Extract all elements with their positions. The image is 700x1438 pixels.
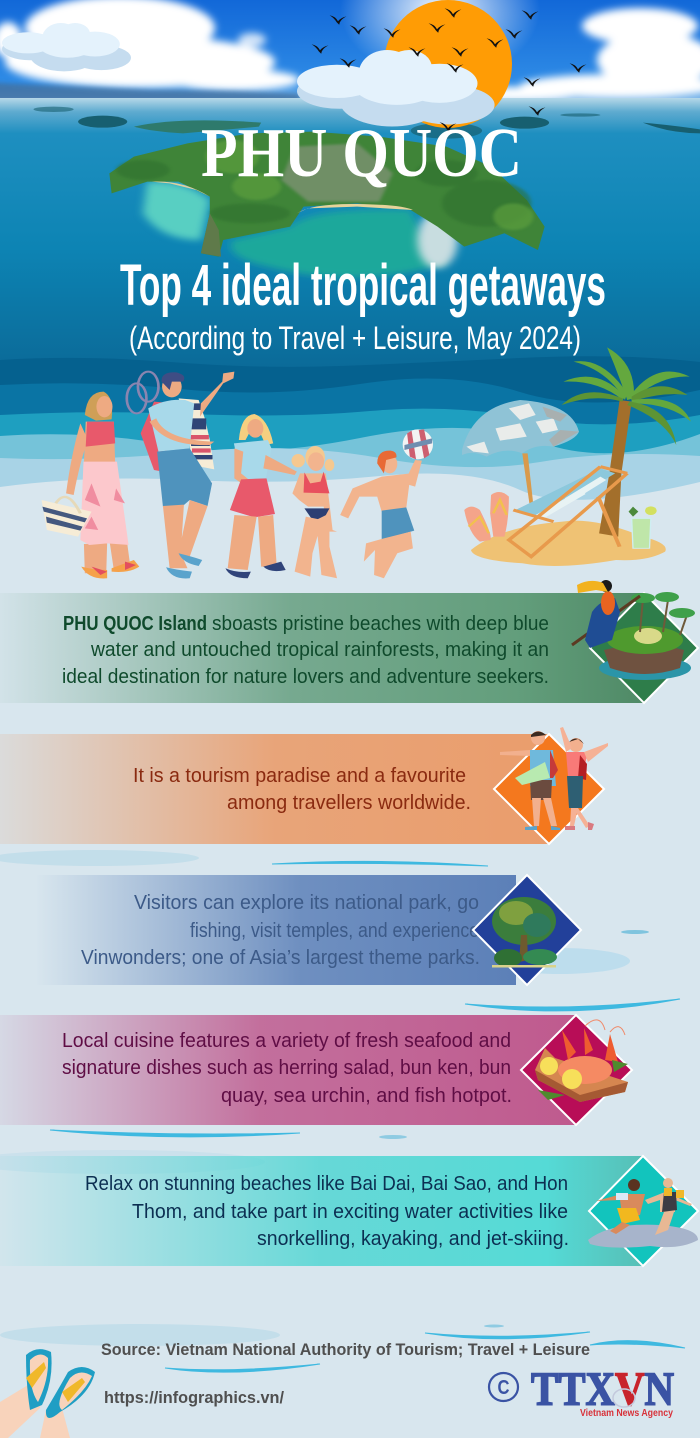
main island: [109, 132, 545, 278]
illustration: feet in flip-flops: [0, 1349, 95, 1438]
diamond badge: [521, 1015, 632, 1125]
panel text: ideal destination for nature lovers and adventure seekers.: [62, 666, 549, 688]
panel text: quay, sea urchin, and fish hotpot.: [221, 1085, 512, 1107]
panel: nature: [0, 580, 698, 703]
small cloud left: [2, 23, 131, 71]
sun: [384, 0, 512, 128]
palm tree: [562, 347, 691, 537]
copyright symbol: [489, 1373, 518, 1401]
panel text: fishing, visit temples, and experience: [190, 920, 479, 942]
sand mound: [471, 521, 666, 566]
young girl in swimsuit: [291, 446, 337, 578]
beach umbrella: [462, 400, 579, 510]
bird flock: [312, 8, 586, 132]
photo clouds: [0, 0, 700, 101]
website link: https://infographics.vn/: [104, 1388, 284, 1407]
icon: travellers with map: [500, 727, 608, 830]
big cloud center: [297, 50, 495, 126]
diamond badge: [494, 734, 604, 844]
illustration: beach chair, umbrella and palm: [462, 347, 691, 566]
resort town: [281, 143, 393, 202]
panel text: Vinwonders; one of Asia’s largest theme parks.: [81, 947, 480, 969]
lagoon shallows: [143, 182, 210, 240]
diamond badge: [589, 1156, 698, 1266]
icon: tropical island: [599, 592, 695, 680]
icon: seafood board: [535, 1020, 628, 1102]
wave bands: [0, 356, 700, 1438]
man with towel and rackets: [127, 372, 234, 579]
sea: [0, 98, 700, 370]
woman with bag: [42, 392, 139, 578]
panel text: PHU QUOC Island: [63, 613, 207, 635]
logo: TTXVN: TTXVN: [531, 1363, 674, 1416]
panel: attractions: [35, 875, 581, 985]
panel text: water and untouched tropical rainforests, making it an: [90, 639, 549, 661]
icon: tropical tree: [492, 897, 557, 968]
mojito glass: [629, 506, 657, 548]
panel background: [0, 1015, 577, 1125]
diamond badge: [473, 875, 581, 985]
panel text: Visitors can explore its national park, go: [134, 892, 479, 914]
panel text: Thom, and take part in exciting water activities like: [132, 1201, 568, 1223]
dark cloud base: [0, 82, 300, 102]
water ripples in background: [0, 850, 685, 1372]
panel: tourism paradise: [0, 727, 608, 844]
panel text: It is a tourism paradise and a favourite: [133, 765, 466, 787]
girl in red skirt: [225, 414, 297, 578]
icon: swimmers jumping: [588, 1178, 698, 1248]
deck chair: [509, 467, 627, 557]
panel: local cuisine: [0, 1015, 632, 1125]
panel text: snorkelling, kayaking, and jet-skiing.: [257, 1228, 569, 1250]
panel: beaches and water sports: [0, 1156, 698, 1266]
panel background: [0, 593, 644, 703]
title: PHU QUOC: [201, 115, 522, 192]
distant islands: [33, 107, 700, 139]
panel text: among travellers worldwide.: [227, 792, 471, 814]
panel background: [0, 734, 549, 844]
icon: toucan: [572, 580, 640, 648]
diamond badge: [590, 593, 698, 703]
copyright symbol: C: [498, 1377, 510, 1399]
panel background: [0, 1156, 643, 1266]
panel text: signature dishes such as herring salad, bun ken, bun: [62, 1057, 511, 1079]
panel background: [35, 875, 516, 985]
boy with beach ball: [340, 429, 433, 578]
logo: TTXVN: Vietnam News Agency: [580, 1408, 673, 1419]
panel text: sboasts pristine beaches with deep blue: [212, 613, 549, 635]
source line: Source: Vietnam National Authority of Tourism; Travel + Leisure: [101, 1340, 590, 1359]
panel text: Relax on stunning beaches like Bai Dai, Bai Sao, and Hon: [85, 1173, 568, 1195]
header photo: Phu Quoc island aerial view: [0, 0, 700, 370]
sky: [0, 0, 700, 105]
flip-flops: [464, 492, 509, 542]
panel text: Local cuisine features a variety of fresh seafood and: [62, 1030, 511, 1052]
sun halo: [340, 0, 540, 80]
illustration: family on the beach: [42, 372, 433, 579]
